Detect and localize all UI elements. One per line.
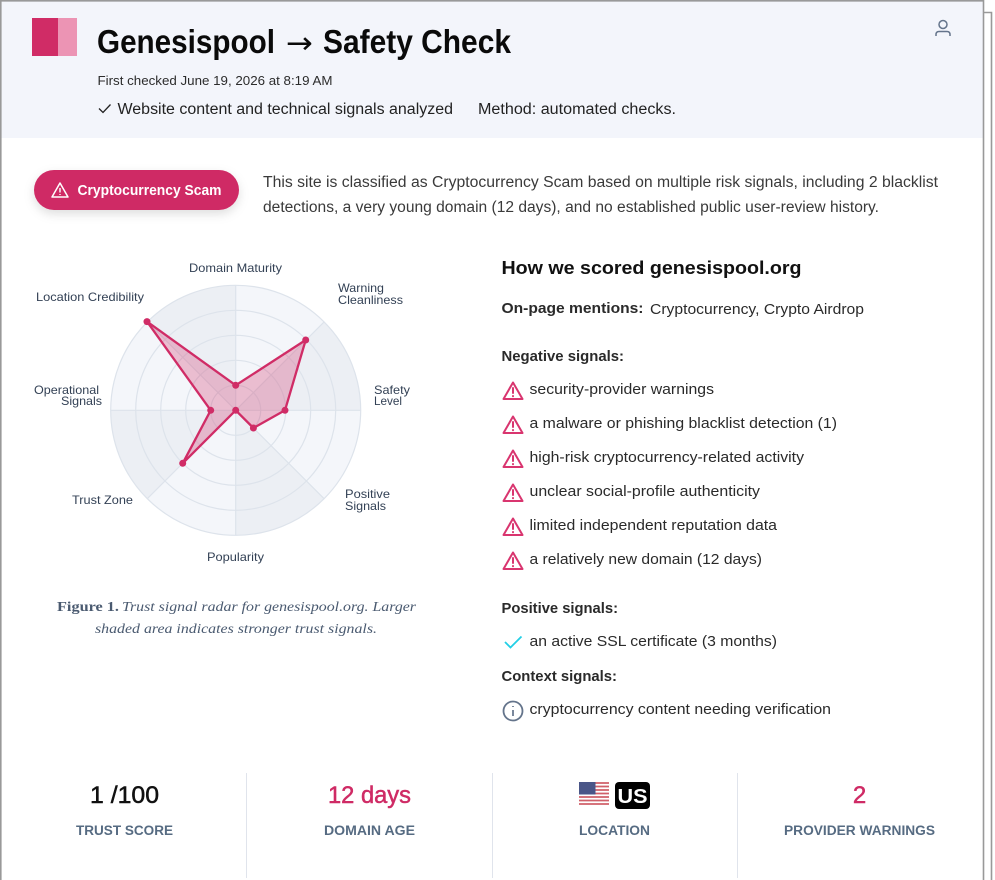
negative signals list (504, 381, 837, 569)
negative signals list: a malware or phishing blacklist detection (1) (530, 415, 837, 432)
radar axis labels: Level (374, 394, 402, 408)
classification summary: detections, a very young domain (12 days), and no established public user-review history. (263, 199, 879, 216)
title: Genesispool (97, 23, 275, 60)
analysis note: Website content and technical signals analyzed (118, 101, 453, 118)
positive signal item: an active SSL certificate (3 months) (530, 633, 777, 650)
stat: domain age (324, 782, 415, 838)
classification badge: Cryptocurrency Scam (78, 183, 222, 199)
radar axis labels: Positive (345, 487, 390, 501)
stat: provider warnings (784, 782, 935, 838)
radar axis labels: Safety (374, 383, 410, 397)
negative signals heading: Negative signals: (502, 348, 624, 365)
stat: trust score: TRUST SCORE (76, 823, 173, 838)
negative signals list: unclear social-profile authenticity (530, 483, 761, 500)
stat: domain age: DOMAIN AGE (324, 823, 415, 838)
icon: user (936, 20, 950, 36)
radar axis labels: Trust Zone (72, 493, 133, 507)
panel: stats row (76, 773, 935, 878)
title (97, 23, 512, 61)
negative signals list: a relatively new domain (12 days) (530, 551, 762, 568)
figure caption (57, 599, 417, 636)
stat: provider warnings: 2 (853, 782, 866, 809)
context signals heading: Context signals: (502, 668, 617, 685)
stat: provider warnings: PROVIDER WARNINGS (784, 823, 935, 838)
stat: location (579, 782, 650, 838)
on-page mentions: On-page mentions: (502, 300, 644, 317)
radar axis labels: Signals (61, 394, 102, 408)
radar axis labels: Operational (34, 383, 99, 397)
negative signals list: high-risk cryptocurrency-related activity (530, 449, 805, 466)
context signal item: cryptocurrency content needing verification (530, 701, 831, 718)
method note: Method: automated checks. (478, 101, 676, 118)
title: Safety Check (323, 23, 512, 60)
radar axis labels: Signals (345, 499, 386, 513)
US badge: US (618, 786, 648, 808)
radar axis labels: Warning (338, 281, 384, 295)
radar axis labels: Domain Maturity (189, 261, 282, 275)
scoring heading: How we scored genesispool.org (502, 257, 802, 278)
on-page mentions (502, 300, 864, 318)
radar axis labels: Popularity (207, 550, 264, 564)
radar chart (34, 261, 410, 564)
classification summary (263, 174, 939, 216)
title: → (286, 26, 313, 61)
icon: US flag (579, 782, 609, 805)
panel: header (1, 1, 983, 138)
stat: location: LOCATION (579, 823, 650, 838)
stat: domain age: 12 days (328, 782, 411, 809)
stat: trust score (76, 782, 173, 838)
negative signals list: limited independent reputation data (530, 517, 778, 534)
positive signals heading: Positive signals: (502, 600, 618, 617)
radar data shape (144, 318, 309, 467)
figure caption: shaded area indicates stronger trust signals. (95, 621, 377, 636)
icon: warning (52, 183, 68, 197)
icon: brand logo (32, 18, 77, 56)
figure caption: Figure 1. (57, 599, 119, 614)
radar axis labels: Location Credibility (36, 290, 144, 304)
panel: how we scored (502, 257, 864, 720)
stat: trust score: 1 /100 (90, 782, 159, 809)
radar axis labels (34, 261, 410, 564)
on-page mentions: Cryptocurrency, Crypto Airdrop (650, 301, 864, 318)
classification summary: This site is classified as Cryptocurrency Scam based on multiple risk signals, including 2 blacklist (263, 174, 939, 191)
checked date: First checked June 19, 2026 at 8:19 AM (98, 73, 332, 88)
classification badge (34, 170, 239, 210)
negative signals list: security-provider warnings (530, 381, 714, 398)
figure caption: Trust signal radar for genesispool.org. Larger (122, 599, 417, 614)
radar axis labels: Cleanliness (338, 293, 403, 307)
